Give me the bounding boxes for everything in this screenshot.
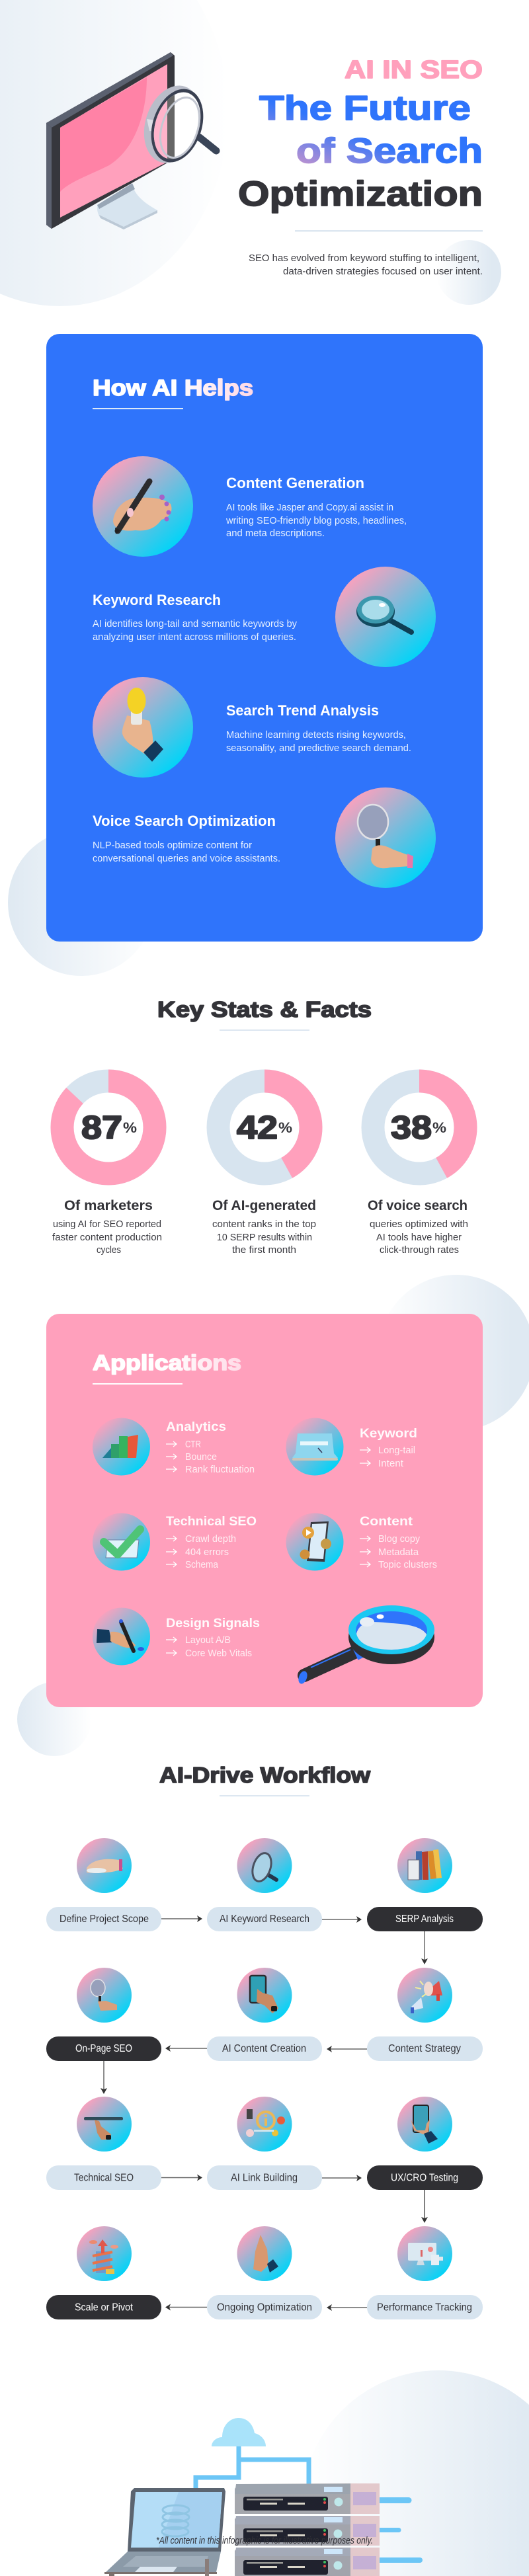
step: Technical SEO	[46, 2097, 161, 2190]
label	[212, 1197, 316, 1256]
arrows	[166, 1637, 177, 1656]
background blob: left of blue panel	[8, 829, 155, 976]
label: Of voice search	[368, 1197, 468, 1213]
item: Search Trend Analysis	[93, 677, 411, 778]
pill	[367, 2036, 483, 2061]
pill	[207, 2036, 322, 2061]
background blob: behind intro text	[436, 240, 501, 305]
text: Core Web Vitals	[185, 1648, 252, 1659]
pill	[367, 2165, 483, 2190]
text	[225, 475, 407, 539]
icon: bar chart	[93, 1418, 150, 1476]
icon: hand writing with pen	[93, 456, 193, 557]
stat: 42 percent	[212, 1081, 316, 1256]
label: 10 SERP results within	[217, 1232, 312, 1243]
text: Keyword Research	[93, 592, 221, 608]
server 1	[235, 2483, 380, 2514]
pill: Define Project Scope	[60, 1913, 149, 1925]
text: Blog copy	[378, 1534, 421, 1545]
step: AI Link Building	[207, 2097, 322, 2190]
text	[166, 1514, 257, 1570]
text: NLP-based tools optimize content for	[93, 840, 252, 851]
text	[360, 1514, 437, 1570]
label	[368, 1197, 468, 1256]
pill	[207, 1907, 322, 1931]
pill: AI Content Creation	[222, 2043, 306, 2054]
title block	[238, 56, 483, 214]
label: AI tools have higher	[376, 1232, 462, 1243]
monitor frame	[46, 52, 175, 229]
text: Analytics	[166, 1420, 226, 1434]
title line: The Future: The Future	[259, 89, 471, 128]
monitor screen	[60, 64, 167, 218]
laptop	[104, 2488, 225, 2576]
pill	[367, 1907, 483, 1931]
donut chart: 38%: %	[432, 1119, 446, 1136]
footer disclaimer: *All content in this infographic is for illustrative purposes only.	[156, 2535, 373, 2546]
pill: On-Page SEO	[75, 2043, 132, 2054]
icon: binders	[397, 1838, 452, 1893]
arrows	[360, 1447, 370, 1466]
text: Topic clusters	[378, 1560, 437, 1570]
arrow	[161, 2174, 202, 2181]
pill: Scale or Pivot	[75, 2302, 134, 2313]
step: UX/CRO Testing	[367, 2097, 483, 2190]
application: Technical SEO	[93, 1513, 257, 1571]
background blob: top left	[0, 0, 228, 306]
text: Design Signals	[166, 1616, 260, 1630]
heading: AI-Drive Workflow: AI-Drive Workflow	[159, 1763, 370, 1787]
text: Bounce	[185, 1452, 217, 1463]
step: On-Page SEO	[46, 1968, 161, 2061]
step: AI Keyword Research	[207, 1838, 322, 1931]
label: cycles	[97, 1245, 121, 1256]
donut chart: 87%: %	[123, 1119, 137, 1136]
icon: finger on phone	[237, 1968, 292, 2023]
background blob: bottom right	[302, 2370, 529, 2576]
pill	[367, 2295, 483, 2319]
label: click-through rates	[380, 1245, 459, 1256]
server stack	[235, 2483, 380, 2576]
pill: Technical SEO	[74, 2173, 134, 2183]
icon: magnifier	[335, 567, 436, 667]
panel: Applications	[46, 1314, 483, 1707]
text	[166, 1616, 260, 1659]
step: AI Content Creation	[207, 1968, 322, 2061]
text: AI identifies long-tail and semantic keywords by	[93, 619, 298, 629]
text: AI tools like Jasper and Copy.ai assist in	[226, 503, 393, 513]
icon: hand holding light bulb	[93, 677, 193, 778]
pill: UX/CRO Testing	[391, 2173, 458, 2183]
arrow	[327, 2304, 367, 2311]
text: Technical SEO	[166, 1514, 257, 1529]
label: Of AI-generated	[212, 1197, 316, 1213]
text: seasonality, and predictive search demand.	[226, 743, 411, 754]
illustration: large magnifying glass	[297, 1605, 434, 1685]
text: Long-tail	[378, 1445, 415, 1456]
step: Ongoing Optimization	[207, 2226, 322, 2319]
text: Keyword	[360, 1426, 417, 1441]
application: Keyword	[286, 1418, 417, 1476]
item: Keyword Research	[93, 567, 436, 667]
cloud	[212, 2418, 266, 2446]
arrow	[165, 2304, 207, 2310]
text	[226, 702, 411, 754]
icon: magnifier	[237, 1838, 292, 1893]
intro text: data-driven strategies focused on user intent.	[283, 266, 483, 277]
item: Content Generation	[93, 456, 407, 557]
text	[360, 1426, 417, 1469]
text: Voice Search Optimization	[93, 813, 276, 829]
item: Voice Search Optimization	[93, 787, 436, 888]
arrow	[101, 2061, 107, 2094]
arrow	[322, 1916, 362, 1923]
step: Scale or Pivot	[46, 2226, 161, 2319]
icon: hand holding mirror	[335, 787, 436, 888]
text: Content Generation	[226, 475, 364, 491]
label: content ranks in the top	[212, 1219, 316, 1230]
label	[52, 1197, 162, 1256]
text: analyzing user intent across millions of queries.	[93, 632, 296, 643]
application: Content	[286, 1513, 437, 1571]
background blob: left of pink panel	[17, 1682, 91, 1756]
pill: AI Link Building	[231, 2173, 298, 2183]
label: the first month	[232, 1245, 296, 1256]
step: SERP Analysis	[367, 1838, 483, 1931]
step: Performance Tracking	[367, 2226, 483, 2319]
text: Content	[360, 1514, 413, 1529]
icon: check mark over laptop	[93, 1513, 150, 1571]
donut chart: 38%: 38	[391, 1110, 432, 1146]
stat: 87 percent	[52, 1081, 162, 1256]
heading: Applications: Applications	[93, 1351, 241, 1375]
text: and meta descriptions.	[226, 528, 325, 539]
stat: 38 percent	[368, 1081, 468, 1256]
text: writing SEO-friendly blog posts, headlines,	[225, 516, 407, 526]
arrows	[360, 1536, 370, 1567]
pill: Content Strategy	[388, 2043, 461, 2054]
donut chart: 42%: 42	[237, 1110, 278, 1146]
server 2	[235, 2516, 380, 2546]
database icon	[162, 2505, 189, 2536]
text: 404 errors	[185, 1547, 229, 1558]
pill	[46, 1907, 161, 1931]
icon: phone with media badges	[286, 1513, 344, 1571]
section: AI-Drive Workflow	[46, 1763, 483, 2319]
icon: hand on mouse	[77, 1838, 132, 1893]
arrows	[166, 1441, 177, 1472]
icon: megaphones	[397, 1968, 452, 2023]
arrow	[161, 1915, 202, 1922]
application: Analytics	[93, 1418, 255, 1476]
icon: hand with marker	[93, 1608, 150, 1665]
pill	[46, 2295, 161, 2319]
donut chart: 42%: %	[278, 1119, 292, 1136]
pill	[207, 2165, 322, 2190]
step: Content Strategy	[367, 1968, 483, 2061]
donut chart: 87%	[62, 1081, 155, 1174]
text: Crawl depth	[185, 1534, 236, 1545]
text: CTR	[185, 1439, 201, 1450]
text: conversational queries and voice assistants.	[93, 854, 280, 864]
arrow	[322, 2175, 362, 2181]
arrows	[166, 1536, 177, 1567]
intro text: SEO has evolved from keyword stuffing to intelligent,	[249, 253, 479, 264]
text	[166, 1420, 255, 1475]
arrow	[421, 1931, 428, 1964]
label: using AI for SEO reported	[53, 1219, 161, 1230]
illustration: cloud, laptop and servers	[104, 2418, 420, 2576]
donut chart: 42%	[218, 1081, 311, 1174]
panel: How AI Helps	[46, 334, 483, 942]
icon: pressed hands	[237, 2226, 292, 2281]
pill: Performance Tracking	[377, 2302, 472, 2313]
arrow	[165, 2045, 207, 2052]
icon: search on laptop	[286, 1418, 344, 1476]
text: Search Trend Analysis	[226, 702, 379, 719]
donut chart: 87%: 87	[81, 1110, 122, 1146]
icon: hand holding phone	[397, 2097, 452, 2152]
heading: How AI Helps: How AI Helps	[93, 376, 253, 401]
text: Rank fluctuation	[185, 1465, 255, 1475]
title line: of Search: of Search	[296, 132, 483, 171]
step: Define Project Scope	[46, 1838, 161, 1931]
server 3	[235, 2548, 380, 2576]
text	[93, 592, 298, 643]
monitor stand	[97, 183, 157, 229]
pill: SERP Analysis	[395, 1913, 454, 1925]
application: Design Signals	[93, 1608, 260, 1665]
text: Machine learning detects rising keywords,	[226, 730, 406, 741]
icon: growing building	[77, 2226, 132, 2281]
background blob: right of pink panel	[378, 1275, 529, 1431]
text	[93, 813, 280, 864]
title line: Optimization: Optimization	[238, 175, 483, 214]
section: Key Stats and Facts	[52, 997, 468, 1256]
icon: hand with mirror	[77, 1968, 132, 2023]
donut chart: 38%	[373, 1081, 466, 1174]
pill: Ongoing Optimization	[217, 2302, 312, 2313]
arrow	[327, 2046, 367, 2052]
cables	[196, 2445, 420, 2560]
text: Schema	[185, 1560, 219, 1570]
icon: finger under tablet	[77, 2097, 132, 2152]
label: faster content production	[52, 1232, 162, 1243]
pill: AI Keyword Research	[220, 1913, 309, 1925]
pill	[207, 2295, 322, 2319]
text: Layout A/B	[185, 1635, 231, 1646]
icon: information ring	[237, 2097, 292, 2152]
eyebrow: AI IN SEO: AI IN SEO	[345, 56, 483, 84]
pill	[46, 2036, 161, 2061]
label: Of marketers	[64, 1197, 153, 1213]
pill	[46, 2165, 161, 2190]
label: queries optimized with	[370, 1219, 468, 1230]
hero illustration: monitor with magnifier	[46, 52, 216, 229]
intro text	[249, 253, 483, 277]
icon: dashboard screens	[397, 2226, 452, 2281]
arrow	[421, 2190, 428, 2223]
heading: Key Stats & Facts: Key Stats & Facts	[157, 997, 372, 1022]
magnifying glass	[144, 86, 220, 163]
text: Metadata	[378, 1547, 419, 1558]
text: Intent	[378, 1459, 403, 1469]
